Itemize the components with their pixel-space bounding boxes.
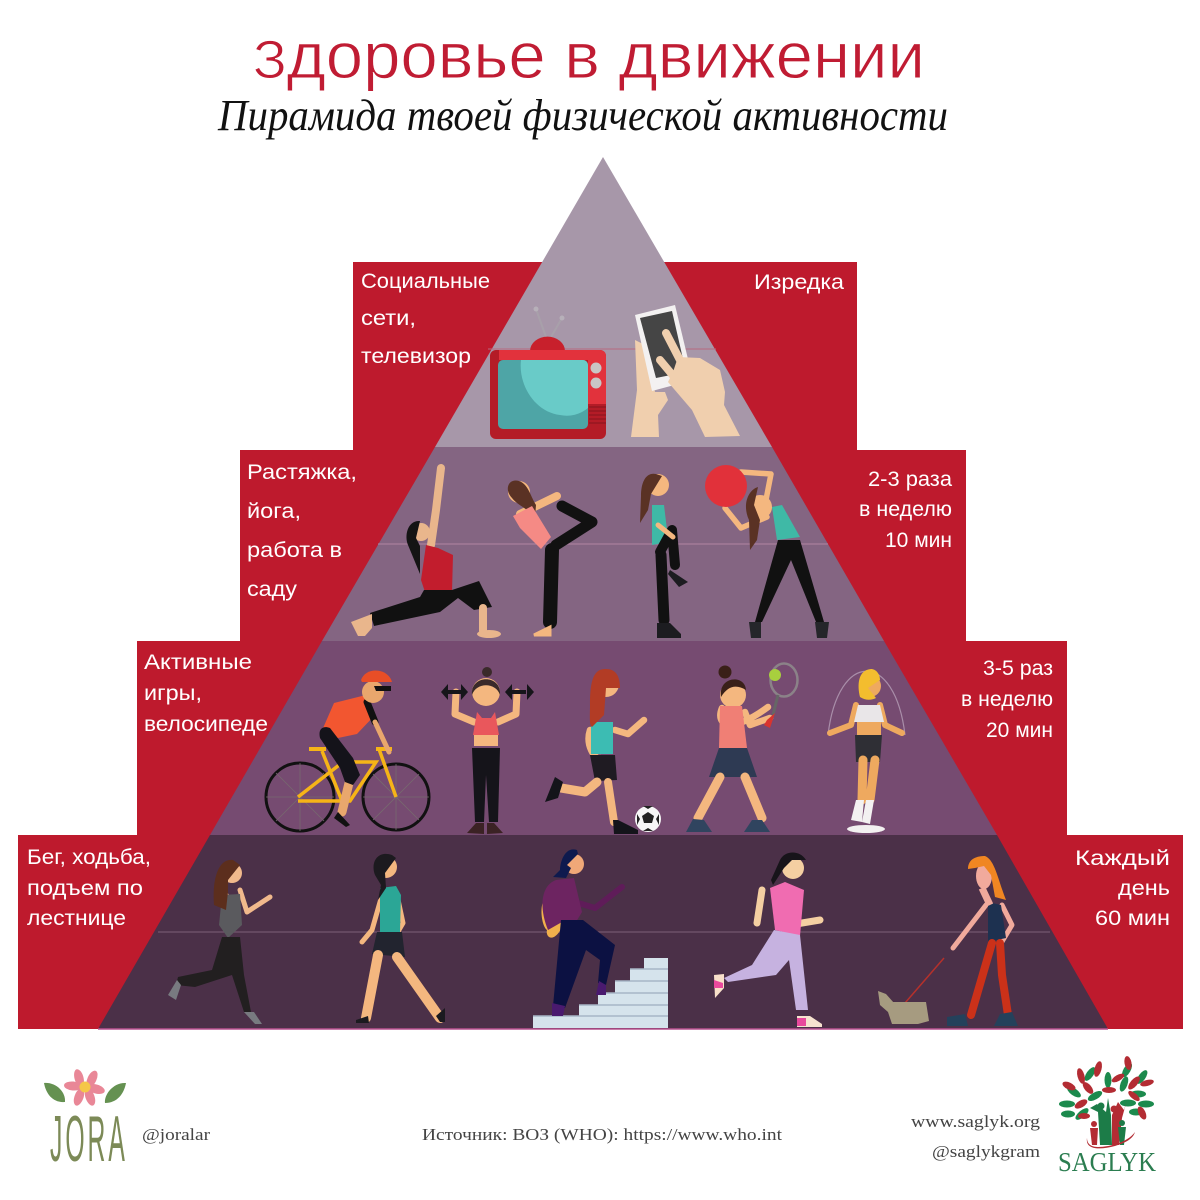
figure: woman with dumbbells: [441, 667, 534, 834]
labels: 2-3 times a week: в неделю: [859, 498, 952, 521]
labels: social media and TV: сети,: [361, 307, 416, 330]
figure: woman walking a dog: [878, 856, 1018, 1026]
source line: Источник: ВОЗ (WHO): https://www.who.int: [422, 1125, 782, 1144]
icon: television: [490, 306, 606, 439]
labels: social media and TV: Социальные: [361, 270, 490, 293]
logo: Jora: [44, 1068, 126, 1176]
labels: every day 60 min: Каждый: [1075, 847, 1170, 870]
labels: 3-5 times a week: в неделю: [961, 688, 1053, 711]
logo: Saglyk tree: SAGLYK: [1058, 1147, 1156, 1177]
labels: every day 60 min: [1075, 847, 1170, 930]
label: rarely: Изредка: [754, 271, 844, 294]
labels: 3-5 times a week: [961, 657, 1053, 742]
figure: cyclist: [266, 670, 429, 831]
labels: active games, cycling: [144, 651, 268, 736]
labels: running, walking, stairs: Бег, ходьба,: [27, 846, 151, 869]
labels: stretching, yoga, gardening: Растяжка,: [247, 461, 357, 484]
figure: woman with skipping rope: [828, 669, 905, 833]
handle: saglykgram: @saglykgram: [932, 1142, 1040, 1161]
title: Здоровье в движении: [253, 19, 925, 92]
labels: 2-3 times a week: 10 мин: [885, 529, 952, 552]
panel: red side bands: [18, 262, 1183, 1029]
labels: 3-5 times a week: 3-5 раз: [983, 657, 1053, 680]
labels: every day 60 min: 60 мин: [1095, 907, 1170, 930]
labels: active games, cycling: игры,: [144, 682, 202, 705]
figure: side stretch with red ball: [705, 465, 829, 638]
labels: 2-3 times a week: [859, 468, 952, 552]
handle: joralar: @joralar: [142, 1125, 211, 1144]
labels: stretching, yoga, gardening: работа в: [247, 539, 342, 562]
labels: active games, cycling: велосипеде: [144, 713, 268, 736]
logo: Jora: JORA: [50, 1103, 125, 1176]
labels: every day 60 min: день: [1118, 877, 1170, 900]
figure: standing knee raise: [640, 474, 688, 638]
figure: woman running with soccer ball: [545, 669, 661, 834]
labels: 2-3 times a week: 2-3 раза: [868, 468, 952, 491]
pyramid: [98, 157, 1108, 1029]
figure: jogging woman: [168, 860, 270, 1024]
labels: social media and TV: [361, 270, 490, 368]
figure: dancer pose: [508, 481, 592, 635]
figure: walking woman: [356, 854, 445, 1023]
figure: running woman in pink: [714, 852, 822, 1027]
figure: warrior yoga pose: [351, 468, 501, 638]
labels: stretching, yoga, gardening: [247, 461, 357, 601]
labels: running, walking, stairs: подъем по: [27, 877, 143, 900]
website: www.saglyk.org: [911, 1112, 1040, 1131]
labels: stretching, yoga, gardening: саду: [247, 578, 298, 601]
subtitle: Пирамида твоей физической активности: [217, 91, 948, 140]
labels: active games, cycling: Активные: [144, 651, 252, 674]
labels: 3-5 times a week: 20 мин: [986, 719, 1053, 742]
logo: Saglyk tree: [1058, 1055, 1156, 1177]
icon: hands holding a smartphone: [631, 305, 740, 437]
figure: woman climbing stairs: [533, 849, 668, 1028]
labels: running, walking, stairs: [27, 846, 151, 930]
labels: social media and TV: телевизор: [361, 345, 471, 368]
labels: stretching, yoga, gardening: йога,: [247, 500, 301, 523]
figure: woman playing tennis: [686, 664, 798, 832]
labels: running, walking, stairs: лестнице: [27, 907, 126, 930]
